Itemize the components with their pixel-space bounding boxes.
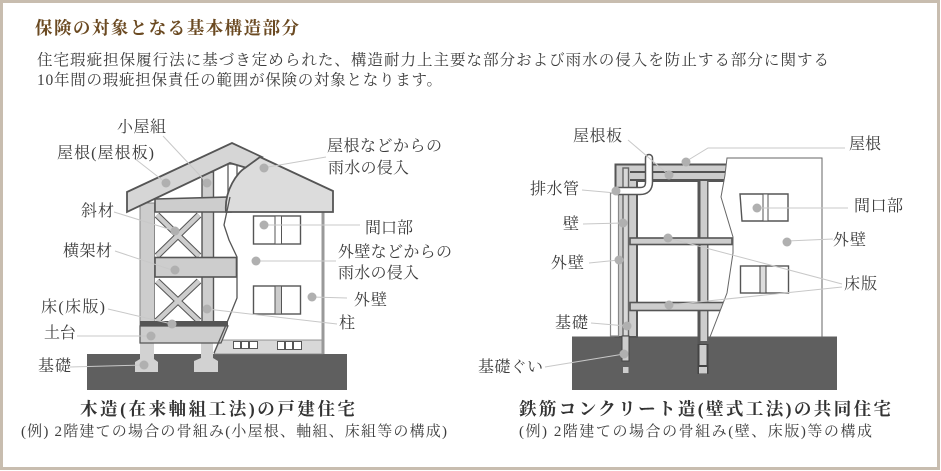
- windows: [740, 194, 788, 293]
- labels: apartment: 排水管: [530, 180, 579, 198]
- labels: wooden house: 横架材: [63, 242, 112, 260]
- labels: wooden house: 斜材: [81, 202, 114, 220]
- labels: wooden house: 間口部: [365, 219, 413, 237]
- caption: apartment: [519, 399, 891, 440]
- beams: [140, 197, 236, 343]
- caption: apartment: (例) 2階建ての場合の骨組み(壁、床版)等の構成: [519, 423, 872, 440]
- description text: 10年間の瑕疵担保責任の範囲が保険の対象となります。: [37, 70, 442, 89]
- caption: wooden house: 木造(在来軸組工法)の戸建住宅: [80, 399, 355, 419]
- caption: wooden house: (例) 2階建ての場合の骨組み(小屋根、軸組、床組等の構成): [21, 422, 447, 440]
- labels: apartment: 壁: [563, 215, 579, 233]
- diagonal braces: [157, 215, 199, 321]
- caption: wooden house: [21, 399, 447, 440]
- central wall: [698, 181, 708, 373]
- labels: apartment: 外壁: [551, 254, 584, 272]
- labels: wooden house: 基礎: [38, 357, 71, 375]
- cut line of exterior wall: [214, 197, 237, 353]
- piles: [622, 336, 708, 374]
- diagram: reinforced concrete apartment: [545, 140, 848, 390]
- ground: [572, 336, 837, 390]
- labels: apartment: 屋根: [849, 134, 881, 153]
- gable wall: [226, 157, 333, 212]
- floor slabs: [630, 238, 732, 310]
- labels: wooden house: 雨水の侵入: [328, 159, 409, 177]
- description text: [37, 50, 829, 89]
- drain pipe: [618, 158, 649, 191]
- ground: [87, 354, 347, 390]
- labels: apartment: 屋根板: [573, 126, 622, 145]
- caption: apartment: 鉄筋コンクリート造(壁式工法)の共同住宅: [519, 399, 891, 419]
- leader lines and dots: [545, 140, 848, 367]
- labels: wooden house: 土台: [44, 324, 76, 342]
- leader lines and dots: [70, 136, 360, 370]
- labels: apartment: 床版: [844, 275, 877, 293]
- labels: wooden house: 柱: [339, 314, 355, 332]
- labels: apartment: [478, 126, 903, 376]
- labels: apartment: 基礎ぐい: [478, 358, 543, 376]
- posts: [140, 164, 237, 327]
- labels: apartment: 外壁: [833, 231, 866, 249]
- diagram: wooden detached house: [70, 136, 360, 390]
- title: 保険の対象となる基本構造部分: [35, 18, 300, 38]
- labels: wooden house: 外壁: [354, 291, 387, 309]
- description text: 住宅瑕疵担保履行法に基づき定められた、構造耐力上主要な部分および雨水の侵入を防止する部分に関する: [37, 50, 829, 69]
- labels: apartment: 間口部: [854, 197, 903, 215]
- labels: wooden house: 屋根(屋根板): [57, 143, 154, 162]
- labels: wooden house: 雨水の侵入: [338, 264, 419, 282]
- foundation footings: [135, 343, 218, 372]
- labels: apartment: 基礎: [555, 314, 588, 332]
- labels: wooden house: 小屋組: [117, 118, 166, 136]
- exterior wall: [710, 158, 822, 337]
- roof slab: [127, 143, 262, 212]
- labels: wooden house: 外壁などからの: [338, 243, 452, 261]
- roof and walls: [610, 164, 727, 337]
- labels: wooden house: 床(床版): [41, 298, 105, 316]
- labels: wooden house: 屋根などからの: [327, 136, 442, 155]
- right wall: [322, 211, 324, 354]
- windows: [254, 216, 300, 314]
- foundation base: [214, 340, 323, 354]
- labels: wooden house: [38, 118, 452, 375]
